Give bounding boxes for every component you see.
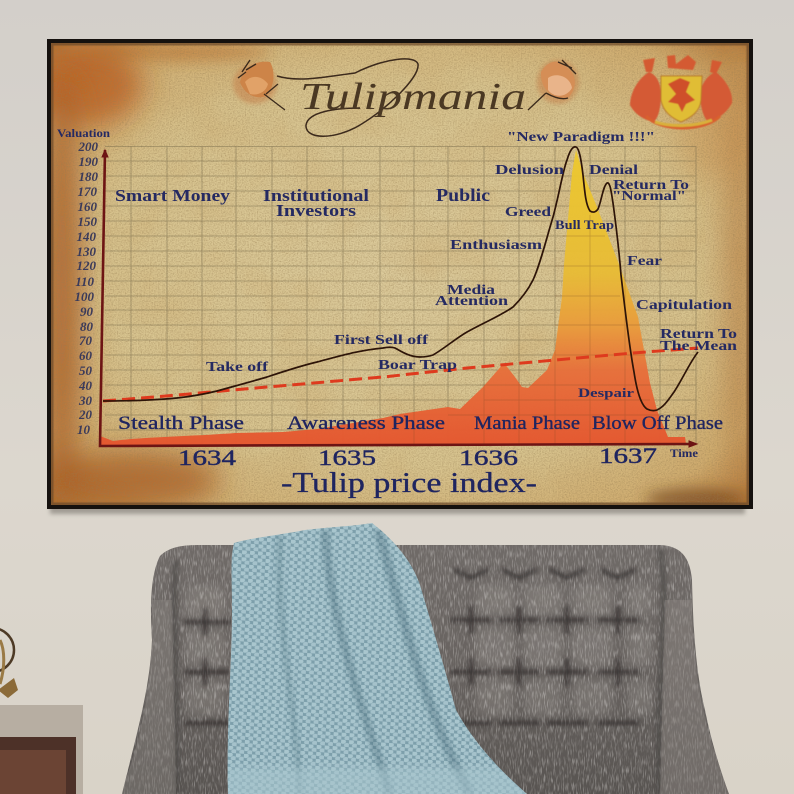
x axis years: Time (670, 448, 698, 460)
curve annotations: Return To (660, 327, 737, 342)
chart caption: -Tulip price index- (281, 468, 537, 499)
curve annotations: "Normal" (612, 189, 686, 204)
y axis values: 20 (78, 407, 92, 422)
title: Tulipmania script (277, 59, 526, 136)
y axis values (74, 139, 98, 437)
x axis years: 1637 (599, 443, 657, 468)
curve annotations: "New Paradigm !!!" (507, 130, 655, 145)
phase labels: Mania Phase (474, 413, 580, 434)
curve annotations: Take off (206, 359, 269, 374)
phase labels: Stealth Phase (118, 413, 244, 434)
armchair (115, 540, 735, 794)
mean reversion dashed trend line (103, 348, 698, 401)
side table (0, 705, 83, 794)
axes (100, 150, 697, 447)
y axis values: 120 (76, 258, 96, 273)
y axis values: 110 (75, 274, 94, 289)
curve annotations: Capitulation (636, 298, 732, 313)
x axis years (178, 443, 698, 470)
icon: left tulip (233, 60, 285, 110)
investor group labels (115, 185, 490, 220)
y axis values: 50 (79, 363, 92, 378)
globe decoration (0, 628, 18, 698)
investor group labels: Institutional (263, 186, 369, 205)
curve annotations: Fear (627, 254, 662, 269)
y axis values: 180 (78, 169, 98, 184)
curve annotations: Boar Trap (378, 357, 457, 372)
y axis values: 150 (78, 214, 98, 229)
y axis values: 30 (78, 393, 92, 408)
y axis values: 60 (79, 348, 92, 363)
y axis values: 70 (79, 333, 92, 348)
framed parchment canvas (33, 39, 760, 510)
curve annotations: Media (447, 283, 495, 298)
investor group labels: Investors (276, 201, 356, 220)
x axis years: 1636 (459, 445, 518, 470)
y axis values: 170 (78, 184, 98, 199)
curve annotations: Bull Trap (555, 217, 614, 232)
y axis values: 140 (76, 229, 96, 244)
curve annotations: First Sell off (334, 332, 429, 347)
y axis values: 90 (80, 304, 94, 319)
grid over area (414, 215, 660, 445)
tufting creases (186, 570, 637, 723)
x axis years: 1634 (178, 445, 236, 470)
icon: right tulip (528, 60, 579, 110)
title: Tulipmania script: Tulipmania (300, 76, 526, 118)
blue knit throw (220, 518, 535, 794)
y axis values: 130 (76, 244, 96, 259)
curve annotations: Greed (505, 205, 551, 220)
investor group labels: Smart Money (115, 186, 231, 205)
investor group labels: Public (436, 185, 490, 205)
y axis values: 200 (78, 139, 98, 154)
y axis title: Valuation (57, 128, 111, 140)
y axis values: 160 (78, 199, 98, 214)
curve annotations: Attention (435, 294, 508, 309)
x axis years: 1635 (318, 445, 376, 470)
framed canvas shadow (50, 505, 745, 514)
curve annotations: The Mean (660, 339, 737, 354)
y axis values: 10 (77, 422, 90, 437)
y axis values: 100 (74, 289, 94, 304)
icon: coat of arms (630, 55, 732, 128)
curve annotations: Despair (578, 385, 634, 400)
curve annotations (206, 130, 737, 400)
price index area chart (100, 150, 686, 445)
y axis values: 80 (80, 319, 94, 334)
phase labels: Awareness Phase (287, 413, 445, 434)
curve annotations: Return To (613, 178, 689, 193)
phase labels (118, 413, 723, 434)
price curve (103, 147, 698, 411)
curve annotations: Denial (589, 163, 638, 178)
curve annotations: Delusion (495, 163, 564, 178)
y axis values: 190 (78, 154, 98, 169)
chart grid (105, 146, 696, 445)
phase labels: Blow Off Phase (592, 413, 723, 434)
curve annotations: Enthusiasm (450, 238, 542, 253)
y axis values: 40 (78, 378, 92, 393)
